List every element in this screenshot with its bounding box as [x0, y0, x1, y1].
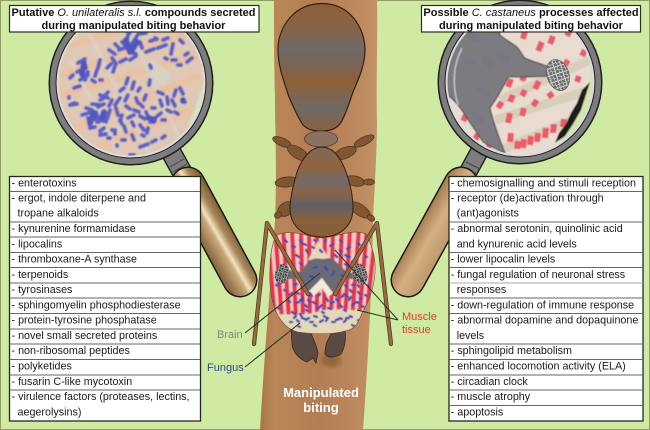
ant petiole	[304, 131, 338, 147]
tree trunk	[260, 0, 377, 430]
panel: fungal compounds: - virulence factors (proteases, lectins,	[12, 391, 190, 403]
label: manipulated biting: biting	[303, 400, 339, 415]
heading: left: Putative O. unilateralis s.l. compounds secreted	[12, 7, 255, 19]
heading: right: during manipulated biting behavior	[439, 20, 624, 32]
mandible shadow	[321, 353, 341, 367]
panel: fungal compounds: tropane alkaloids	[18, 208, 99, 220]
label: brain: Brain	[217, 329, 243, 341]
heading: left	[10, 6, 259, 32]
panel: ant processes	[449, 176, 643, 421]
panel: fungal compounds: - non-ribosomal peptides	[12, 345, 130, 357]
panel: ant processes: - abnormal serotonin, quinolinic acid	[451, 223, 623, 235]
magnifier: fungus lens	[48, 0, 214, 166]
panel: ant processes: and kynurenic acid levels	[457, 238, 577, 250]
panel: ant processes: - receptor (de)activation through	[451, 193, 604, 205]
panel: ant processes: - circadian clock	[451, 376, 528, 388]
fungus in head	[272, 240, 369, 327]
heading: left: during manipulated biting behavior	[42, 20, 226, 32]
heading: right: Possible C. castaneus processes affected	[423, 7, 639, 19]
leader lines	[245, 250, 398, 367]
panel: ant processes: - muscle atrophy	[451, 391, 531, 403]
label: fungus: Fungus	[207, 362, 244, 374]
panel: fungal compounds: - tyrosinases	[12, 284, 72, 296]
ant head	[269, 232, 376, 334]
panel: fungal compounds: - novel small secreted proteins	[12, 330, 157, 342]
panel: fungal compounds: - lipocalins	[12, 238, 62, 250]
panel: ant processes: (ant)agonists	[457, 208, 519, 220]
label: manipulated biting: Manipulated	[283, 385, 359, 400]
panel: ant processes: - abnormal dopamine and dopaquinone	[451, 315, 638, 327]
panel: ant processes: responses	[457, 284, 506, 296]
panel: ant processes: levels	[457, 330, 484, 342]
panel: fungal compounds: - kynurenine formamidase	[12, 223, 136, 235]
panel: fungal compounds: aegerolysins)	[18, 406, 81, 418]
panel: fungal compounds: - fusarin C-like mycotoxin	[12, 376, 132, 388]
magnifier handle: left	[170, 152, 240, 280]
panel: fungal compounds: - sphingomyelin phosphodiesterase	[12, 299, 181, 311]
panel: ant processes: - down-regulation of immune response	[451, 299, 634, 311]
panel: ant processes: - chemosignalling and stimuli reception	[451, 178, 636, 190]
panel: ant processes: - lower lipocalin levels	[451, 254, 555, 266]
panel: fungal compounds: - polyketides	[12, 360, 72, 372]
ant gaster	[278, 4, 365, 131]
panel: fungal compounds: - enterotoxins	[12, 178, 77, 190]
brain lobes	[273, 262, 291, 286]
magnifier: brain and muscle lens	[438, 0, 602, 164]
muscle stripes	[270, 232, 374, 316]
panel: ant processes: - sphingolipid metabolism	[451, 345, 572, 357]
ant mandibles	[291, 328, 345, 363]
label: muscle tissue: Muscle	[402, 311, 437, 323]
panel: ant processes: - fungal regulation of neuronal stress	[451, 269, 625, 281]
label: muscle tissue: tissue	[402, 324, 431, 336]
panel: ant processes: - enhanced locomotion activity (ELA)	[451, 360, 626, 372]
magnifier handle: right	[408, 152, 480, 280]
heading: right	[422, 6, 640, 32]
panel: ant processes: - apoptosis	[451, 406, 503, 418]
panel: fungal compounds	[10, 176, 200, 421]
brain	[288, 258, 353, 293]
neuron hex oval	[546, 59, 570, 91]
ant thorax	[290, 147, 353, 237]
ant legs	[271, 132, 376, 223]
panel: fungal compounds: - terpenoids	[12, 269, 68, 281]
panel: fungal compounds: - ergot, indole diterpene and	[12, 193, 146, 205]
ant antennae	[254, 223, 391, 344]
panel: fungal compounds: - thromboxane-A synthase	[12, 254, 137, 266]
panel: fungal compounds: - protein-tyrosine phosphatase	[12, 315, 157, 327]
